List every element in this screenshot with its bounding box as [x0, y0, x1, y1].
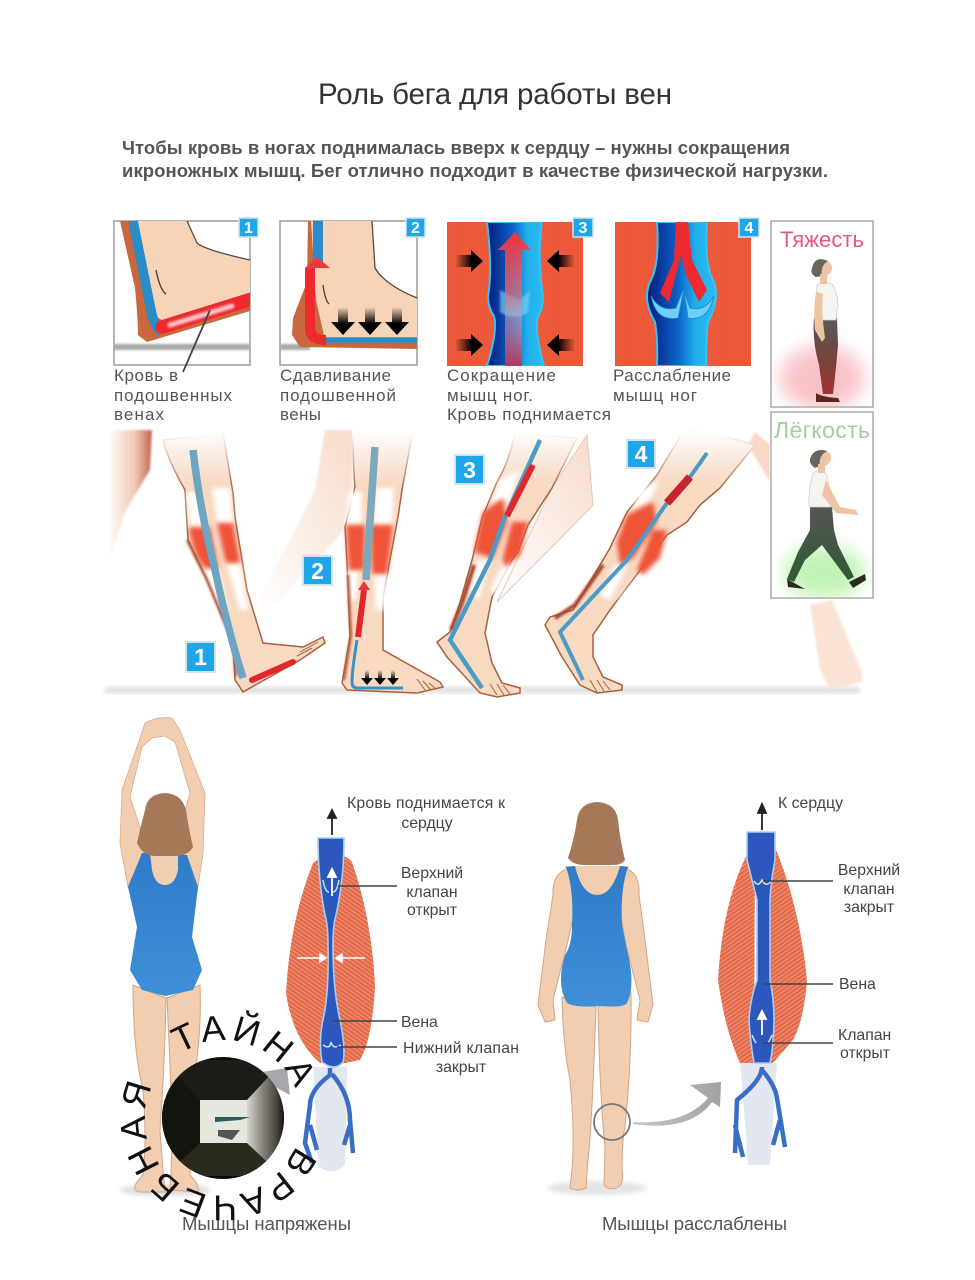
- caption 3: мышц ног.: [447, 386, 533, 405]
- right figure: back view, relaxed: [538, 802, 653, 1195]
- watermark text ring: ТАЙНА ВРАЧЕБНАЯ: [120, 1010, 316, 1220]
- watermark logo: corridor circle: [162, 1057, 284, 1179]
- leg 2 back edge shading: [344, 575, 351, 680]
- caption 3: Кровь поднимается: [447, 405, 611, 424]
- labels: right diagram: [778, 795, 900, 1062]
- leg 3 vein: [450, 440, 540, 688]
- labels: left diagram: сердцу: [401, 815, 453, 832]
- labels: left diagram: Нижний клапан: [403, 1040, 519, 1057]
- branching veins: [735, 1067, 785, 1157]
- leg 3: [437, 432, 593, 697]
- vein valves: [323, 880, 341, 1047]
- leg 4 vein: [560, 453, 707, 680]
- panel 3: muscle contraction: [447, 222, 583, 366]
- leg 2: [342, 430, 443, 693]
- labels: right diagram: открыт: [840, 1045, 890, 1062]
- intro text: икроножных мышц. Бег отлично подходит в качестве физической нагрузки.: [122, 160, 828, 181]
- badge 3: [573, 218, 593, 237]
- vein valves: [752, 880, 772, 1043]
- card: heaviness: [771, 221, 873, 410]
- caption 2: [280, 366, 396, 424]
- badge 1: 1: [244, 220, 253, 237]
- left figure: back view with raised arms: [120, 718, 210, 1196]
- tendon: [740, 1063, 777, 1165]
- white flow arrow: [328, 869, 336, 896]
- labels: left diagram: открыт: [407, 902, 457, 919]
- intro text: [122, 137, 828, 181]
- badge large 4: [627, 440, 655, 468]
- contracted muscle: [286, 856, 375, 1065]
- white flow arrow: [758, 1011, 766, 1035]
- badge 3: 3: [579, 220, 588, 237]
- leg 1 tendons: [186, 488, 248, 610]
- labels: right diagram: Вена: [839, 976, 876, 993]
- badge 1: [239, 218, 258, 237]
- badge 2: 2: [411, 220, 420, 237]
- caption: muscles relaxed: Мышцы расслаблены: [602, 1213, 787, 1234]
- leg 2 tendons: [346, 488, 394, 610]
- tendon: [313, 1067, 347, 1172]
- caption 1: венах: [114, 405, 164, 424]
- caption 4: [613, 366, 731, 405]
- leg 4 red segment: [667, 477, 690, 503]
- caption 3: Сокращение: [447, 366, 556, 385]
- card: lightness: Лёгкость: [774, 417, 870, 443]
- leg 2 pressure arrows: [361, 670, 399, 685]
- contracted vein: [318, 838, 344, 1067]
- leg 4: [545, 425, 755, 693]
- badge large 2: [303, 556, 332, 585]
- caption 4: мышц ног: [613, 386, 697, 405]
- branching veins: [305, 1068, 353, 1163]
- title: Роль бега для работы вен: [318, 78, 672, 111]
- panel 2: compression of plantar vein: [280, 221, 417, 365]
- labels: right diagram: К сердцу: [778, 795, 843, 812]
- leg 1 vein: [193, 450, 243, 678]
- badge large 3: [455, 455, 484, 484]
- card: lightness: [771, 412, 873, 598]
- caption 2: подошвенной: [280, 386, 396, 405]
- badge large 1: 1: [194, 644, 207, 670]
- leg 2 muscles: [346, 525, 393, 574]
- caption 1: [114, 366, 232, 424]
- leg 3 red arrow: [507, 465, 533, 516]
- leader lines: right diagram: [763, 881, 833, 1043]
- arrow up: left diagram: [328, 810, 336, 835]
- badge 2: [406, 218, 425, 237]
- leg 2 rising red vein and arrow: [358, 590, 364, 637]
- labels: left diagram: Кровь поднимается к: [347, 795, 505, 812]
- intro text: Чтобы кровь в ногах поднималась вверх к сердцу – нужны сокращения: [122, 137, 790, 158]
- badge large 3: 3: [463, 457, 476, 483]
- muscle diagram: relaxed: [718, 832, 807, 1165]
- leg 4 muscles: [617, 502, 667, 575]
- leg 1 muscles: [189, 523, 240, 568]
- knee highlight circle: [594, 1104, 630, 1140]
- floor shadow: [105, 687, 860, 693]
- labels: left diagram: [347, 795, 519, 1076]
- panel 4: muscle relaxation: [615, 222, 751, 366]
- badge large 2: 2: [311, 558, 324, 584]
- labels: right diagram: клапан: [843, 881, 895, 898]
- card: heaviness: Тяжесть: [780, 227, 864, 252]
- leg 1 back edge shading: [187, 540, 236, 676]
- leg 2 plantar vein: [352, 640, 403, 688]
- squeeze arrows: [297, 954, 365, 962]
- labels: left diagram: клапан: [406, 884, 458, 901]
- caption 4: Расслабление: [613, 366, 731, 385]
- pointer arrow: knee to muscle detail: [633, 1082, 721, 1126]
- labels: right diagram: Верхний: [838, 862, 900, 879]
- caption 2: Сдавливание: [280, 366, 391, 385]
- badge large 4: 4: [635, 441, 648, 467]
- arrow up: right diagram: [758, 804, 766, 830]
- leg 1 red plantar vein: [252, 662, 293, 680]
- leg 4 back edge shading: [555, 565, 603, 618]
- leg 4 tendons: [600, 480, 660, 605]
- muscle diagram: contracted: [286, 838, 375, 1172]
- relaxed muscle: [718, 850, 807, 1063]
- leader lines: left diagram: [333, 886, 397, 1047]
- labels: left diagram: Верхний: [401, 865, 463, 882]
- caption 1: Кровь в: [114, 366, 178, 385]
- badge 4: [739, 218, 759, 237]
- labels: right diagram: закрыт: [844, 899, 894, 916]
- labels: left diagram: закрыт: [436, 1059, 486, 1076]
- caption 3: [447, 366, 611, 424]
- hidden grey arrow head behind watermark: [240, 1068, 290, 1118]
- labels: right diagram: Клапан: [838, 1027, 891, 1044]
- caption: muscles tensed: Мышцы напряжены: [182, 1213, 351, 1234]
- leg 3 tendons: [470, 470, 520, 600]
- leg 3 back edge shading: [451, 565, 474, 630]
- faded background legs: [108, 430, 862, 690]
- badge large 1: [186, 642, 215, 672]
- leg 2 vein: [366, 447, 375, 580]
- panel 1: blood in plantar veins: [114, 221, 252, 372]
- leg 3 muscles: [474, 498, 528, 567]
- caption 1: подошвенных: [114, 386, 232, 405]
- labels: left diagram: Вена: [401, 1014, 438, 1031]
- relaxed vein: [747, 832, 775, 1063]
- badge 4: 4: [745, 220, 754, 237]
- caption 2: вены: [280, 405, 321, 424]
- leg 1: [163, 433, 325, 692]
